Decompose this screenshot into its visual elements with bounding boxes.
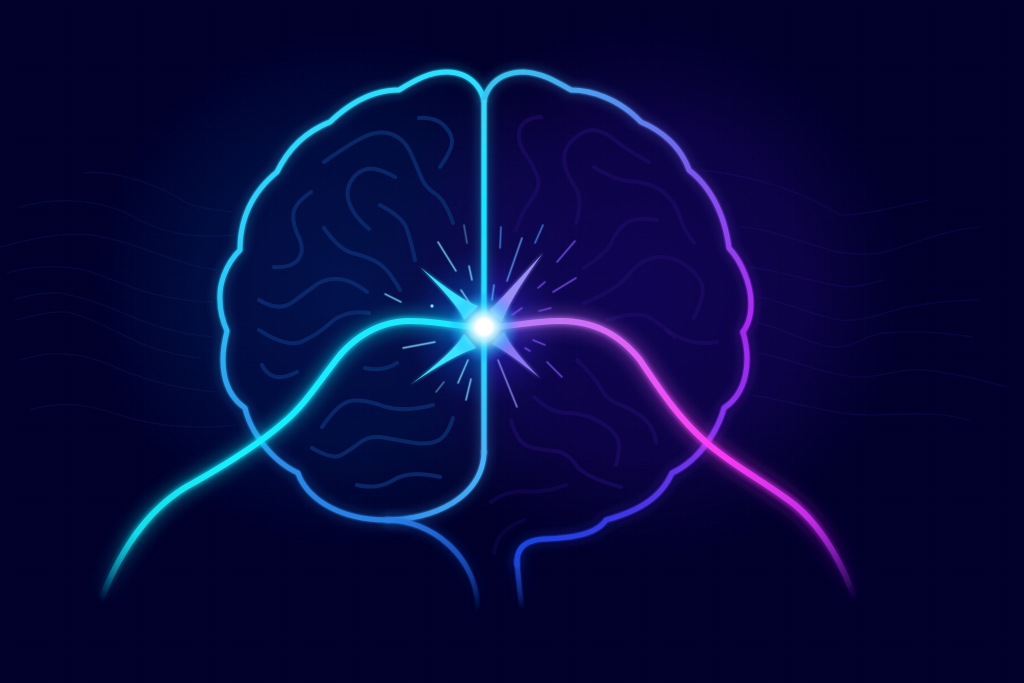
left hemisphere outline bbox=[220, 72, 484, 520]
midline bbox=[482, 100, 486, 454]
brain folds: left hemisphere bbox=[259, 118, 453, 487]
spark core bbox=[448, 291, 520, 363]
magenta neural curve bbox=[484, 321, 856, 602]
right hemisphere upper outline bbox=[484, 72, 751, 332]
central halo bbox=[404, 245, 564, 409]
cyan neural curve bbox=[100, 321, 484, 602]
left stem bbox=[387, 520, 478, 612]
wave lines: left side bbox=[0, 172, 235, 427]
right stem bbox=[517, 560, 522, 612]
left lobe bottom curve bbox=[387, 452, 484, 520]
brain outline bbox=[220, 72, 751, 612]
spark streaks: violet side bbox=[498, 241, 576, 407]
right hemisphere lower outline bbox=[517, 332, 747, 565]
spark streaks: cyan side bbox=[385, 225, 543, 400]
brain folds: right hemisphere bbox=[491, 117, 717, 553]
wave lines: right side bbox=[700, 170, 1007, 420]
spark main rays bbox=[410, 253, 543, 385]
spark dot bbox=[430, 304, 434, 308]
